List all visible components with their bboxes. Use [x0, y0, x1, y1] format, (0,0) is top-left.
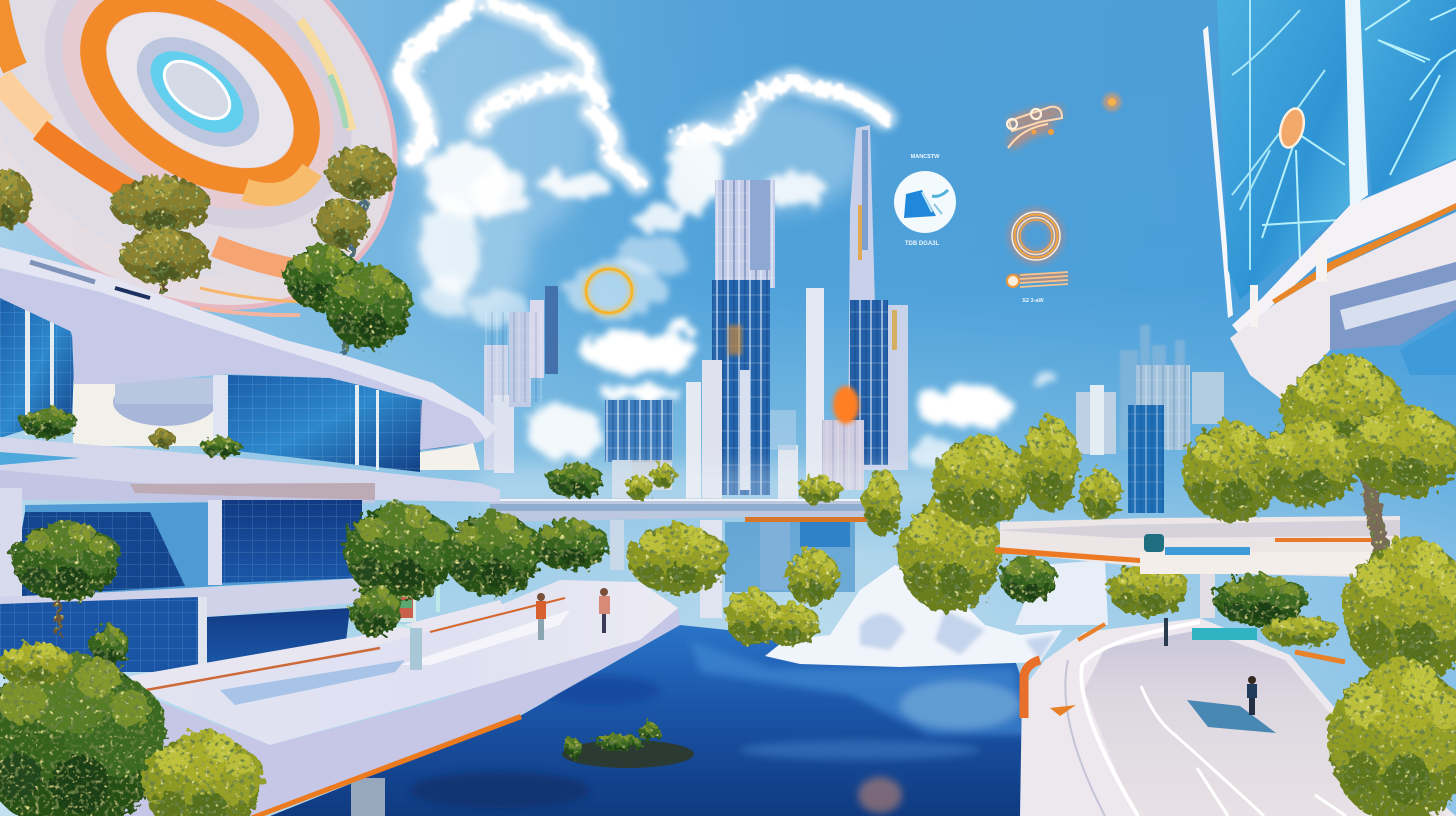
- pillar in water: [351, 778, 385, 816]
- building: upper glass: [0, 298, 480, 472]
- trees upper left: [0, 146, 412, 457]
- kiosk on walkway: [382, 585, 438, 670]
- person on walkway: [599, 588, 610, 633]
- road: orange barrier: [1024, 660, 1040, 718]
- tree: lower left of building: [10, 520, 121, 635]
- clouds: [403, 3, 1059, 470]
- left building: [0, 247, 500, 672]
- tower cluster left: [484, 286, 558, 473]
- trees right: [1181, 353, 1456, 816]
- snow covered island: [765, 560, 1108, 667]
- cloud: right cumulus behind towers: [615, 80, 885, 275]
- far blue tower block: [605, 400, 673, 500]
- curved road right: [1020, 618, 1456, 816]
- twin spire towers: [806, 125, 908, 490]
- tree: bottom left: [0, 642, 264, 816]
- building: lower deck: [0, 578, 365, 617]
- tree: large right: [1253, 353, 1456, 555]
- building: middle floor bands: [0, 437, 500, 502]
- person far on road: [1164, 618, 1168, 646]
- cloud: lower hazy clouds: [470, 260, 1059, 470]
- top right holographic tower: [1203, 0, 1456, 400]
- trees central: [546, 414, 1189, 646]
- tower: circular base: [1232, 160, 1456, 335]
- text: badge caption bottom: TDB DGA3L: [905, 241, 939, 247]
- tree: tall behind roof: [284, 146, 412, 355]
- building: curved roof: [0, 247, 497, 450]
- icon: small orange dot: [1103, 93, 1121, 111]
- text: gauge caption: S2 3-aW: [1022, 298, 1045, 304]
- icon: drone glyph: [1007, 107, 1062, 148]
- trees left foreground: [0, 501, 608, 816]
- road: blue floor panel: [1187, 700, 1276, 733]
- text: badge caption top: MANCSTW: [911, 154, 940, 160]
- icon: white circular badge: [894, 171, 956, 233]
- river water: [270, 625, 1035, 816]
- person on walkway: [536, 593, 546, 640]
- tree: mid right: [1181, 419, 1281, 522]
- central tall tower: [686, 180, 798, 500]
- shrubs behind road: [1212, 573, 1339, 646]
- right elevated deck: [995, 516, 1400, 618]
- tower: white frame: [1203, 26, 1233, 318]
- holographic ring disc: top left: [0, 0, 478, 396]
- person on road: [1247, 676, 1257, 715]
- icon: golden halo ring: [586, 269, 632, 313]
- central pedestrian bridge: [490, 498, 872, 618]
- cloud: large central cumulus: [403, 3, 638, 320]
- small island in water: [562, 721, 694, 768]
- distant city towers right: [1076, 325, 1224, 513]
- hologram icons: [586, 93, 1121, 313]
- tree: far left edge: [0, 169, 32, 228]
- walkway: top surface: [130, 580, 678, 745]
- tree: foreground right: [1326, 536, 1456, 816]
- walkway: side face: [70, 608, 680, 816]
- tree: near roof left: [110, 176, 210, 295]
- tree: large central left: [342, 501, 608, 638]
- tower: screen panels: [1217, 0, 1350, 300]
- tree: balcony shrubs: [19, 407, 241, 457]
- icon: concentric ring: [1012, 212, 1060, 260]
- building: middle glass: [25, 500, 362, 597]
- hazy horizon: [480, 465, 1000, 510]
- left elevated walkway: [70, 580, 680, 816]
- road: lane markings: [1141, 686, 1346, 816]
- icon: orange bar gauge: [1007, 272, 1068, 287]
